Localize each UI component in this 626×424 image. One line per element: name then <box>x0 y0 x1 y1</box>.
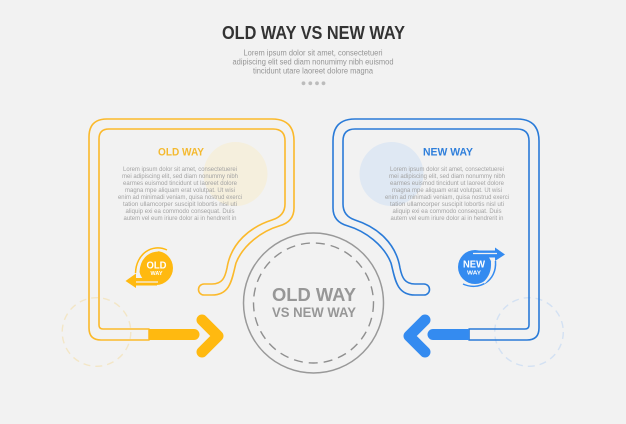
body text: new way: aliquip exi ea commodo consequat. Duis <box>392 208 502 215</box>
center text <box>272 285 356 320</box>
title: OLD WAY VS NEW WAY <box>222 22 406 43</box>
body text: old way <box>118 166 242 222</box>
icon: new way badge: NEW <box>463 260 486 270</box>
outline: old way <box>89 119 294 340</box>
body text: new way: magna mpe aliquam erat volutpat. Ut wisi <box>392 187 502 194</box>
body text: old way: aliquip exi ea commodo consequat. Duis <box>126 208 234 215</box>
panel: new way <box>333 119 563 366</box>
body text: old way: tation ullamcorper suscipit lobortis nisl uti <box>123 201 237 208</box>
arrow head: new way <box>409 320 425 352</box>
arrow bar: old way <box>149 329 200 340</box>
body text: old way: magna mpe aliquam erat volutpat. Ut wisi <box>125 187 235 194</box>
pagination dots <box>302 81 325 85</box>
panel: old way <box>62 119 294 366</box>
body text: new way: mei adipiscing elit, sed diam nonummy nibh <box>389 173 505 180</box>
icon: old way badge <box>126 248 173 288</box>
center text: OLD WAY <box>272 285 356 305</box>
intro text <box>232 48 394 76</box>
body text: old way: earmes euismod tincidunt ut laoreet dolore <box>123 180 237 187</box>
body text: old way: autem vel eum iriure dolor ai in hendrerit in <box>124 215 237 222</box>
body text: new way: tation ullamcorper suscipit lobortis nisl uti <box>390 201 504 208</box>
decorative circle: old way <box>204 142 268 206</box>
heading: new way: NEW WAY <box>423 146 474 158</box>
heading: old way: OLD WAY <box>158 146 205 158</box>
icon: new way badge: WAY <box>467 270 481 276</box>
decorative circle: new way <box>360 142 424 206</box>
arrow head: old way <box>202 320 218 352</box>
body text: new way: Lorem ipsum dolor sit amet, consectetuerei <box>390 166 504 173</box>
body text: old way: Lorem ipsum dolor sit amet, consectetuerei <box>123 166 237 173</box>
body text: new way: enim ad minimadi veniam, quisa nostrud exerci <box>385 194 509 201</box>
dashed circle: new way <box>495 298 563 366</box>
body text: old way: mei adipiscing elit, sed diam nonummy nibh <box>122 173 238 180</box>
icon: old way badge: WAY <box>150 271 163 277</box>
center text: VS NEW WAY <box>272 305 356 320</box>
intro text: adipiscing elit sed diam nonumimy nibh euismod <box>232 58 394 66</box>
icon: new way badge <box>458 248 505 286</box>
intro text: Lorem ipsum dolor sit amet, consectetueri <box>244 48 383 58</box>
center circle <box>244 233 384 373</box>
arrow bar: new way <box>428 329 469 340</box>
intro text: tincidunt utare laoreet dolore magna <box>253 66 374 76</box>
icon: old way badge: OLD <box>146 260 166 272</box>
body text: new way: autem vel eum iriure dolor ai in hendrerit in <box>390 215 504 222</box>
body text: new way: earmes euismod tincidunt ut laoreet dolore <box>390 180 504 187</box>
outline: new way <box>333 119 539 340</box>
dashed circle: old way <box>62 298 131 366</box>
body text: old way: enim ad minimadi veniam, quisa nostrud exerci <box>118 194 242 201</box>
body text: new way <box>385 166 509 222</box>
